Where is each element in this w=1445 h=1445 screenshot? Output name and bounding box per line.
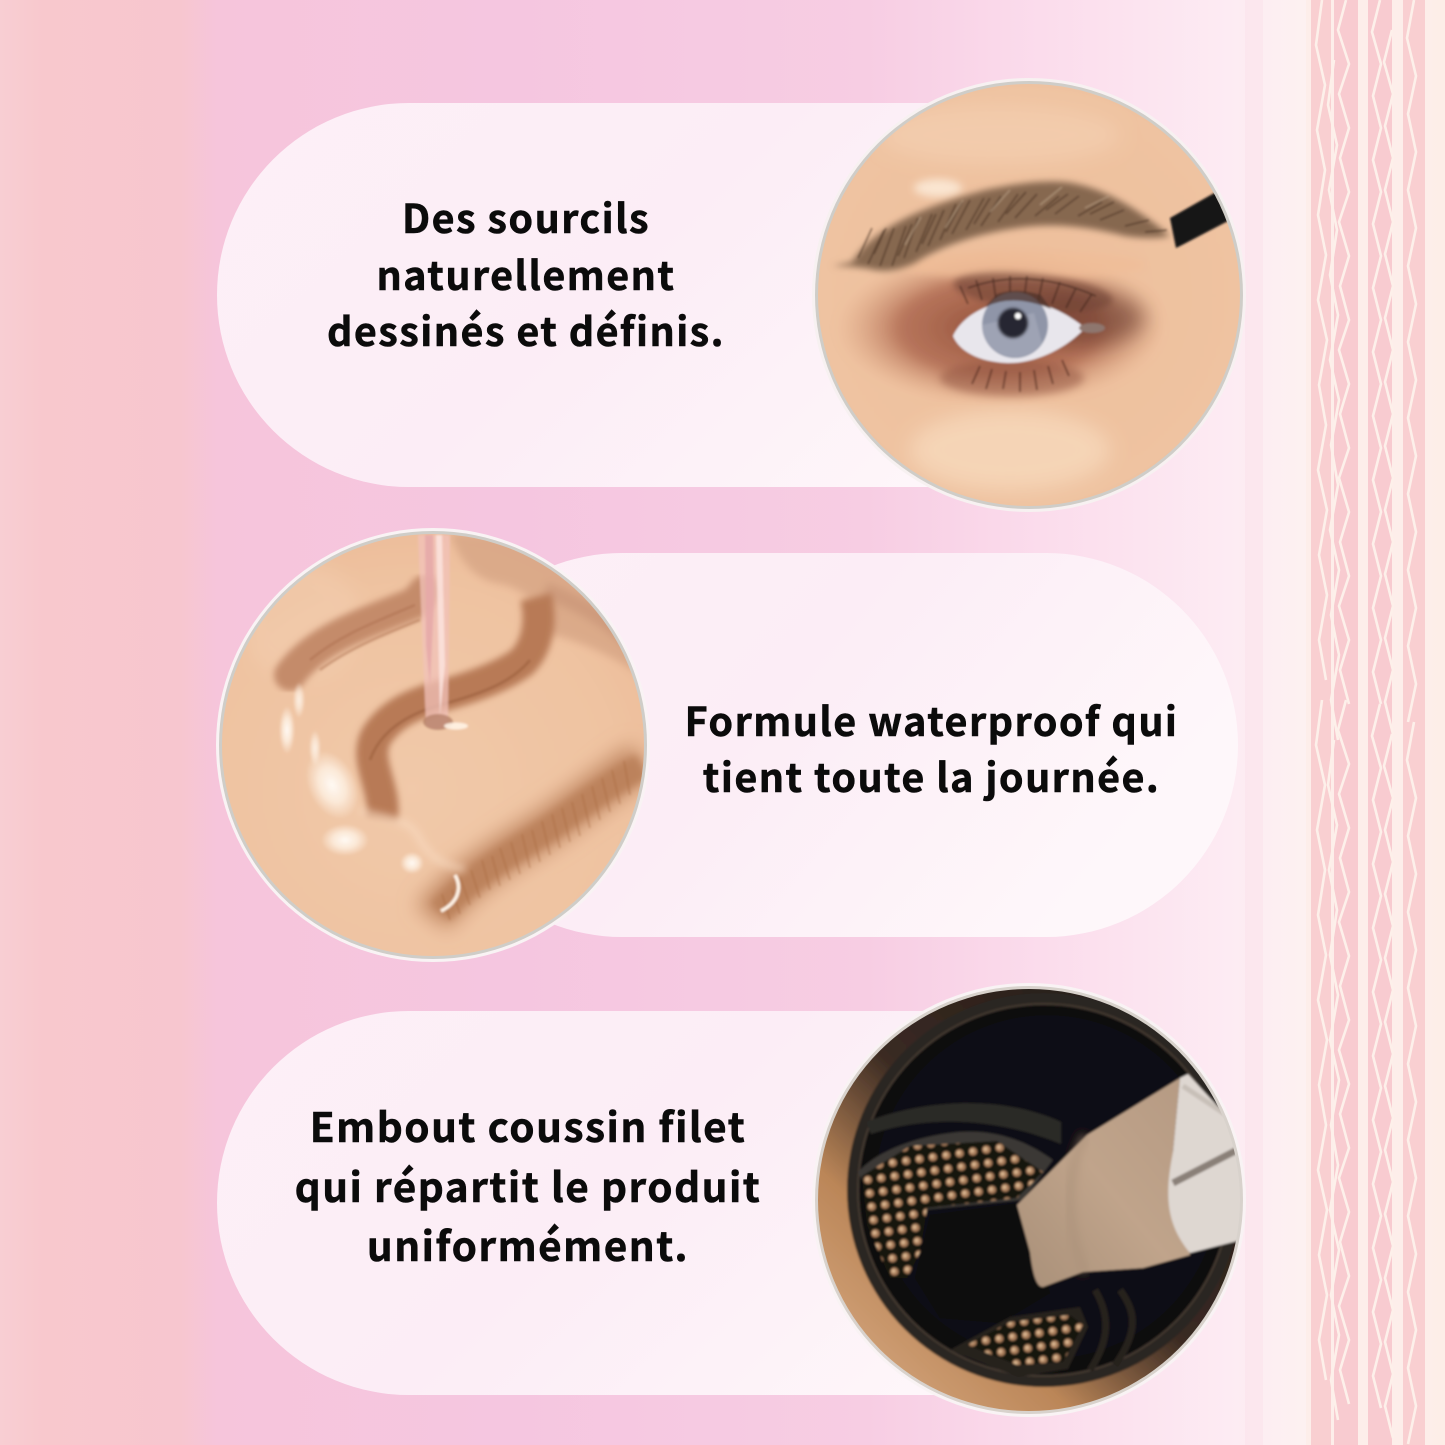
text: mesh cushion: Embout coussin filet [310,1095,746,1154]
water stream [418,535,450,730]
inner rim [847,993,1241,1387]
eyeball [953,300,1085,363]
decorative lace strip [1306,0,1432,1445]
lower brow stroke [432,760,642,918]
text: mesh cushion [295,1095,761,1273]
pill: natural brows [217,103,1217,487]
brush [1170,192,1230,248]
upper lash band [952,268,1114,311]
mesh patches [862,1141,1043,1278]
cushion pad ring [866,1103,1061,1144]
panel: natural brows [217,70,1260,520]
text: natural brows: naturellement [376,245,676,302]
text: natural brows [327,188,725,358]
photo: water on brow swatch [216,528,647,962]
eye socket shadow [850,270,1151,400]
pill: mesh cushion [217,1011,1217,1395]
photo: cushion applicator [800,975,1260,1417]
text: mesh cushion: uniformément. [367,1214,689,1273]
text: waterproof: tient toute la journée. [703,747,1160,804]
applicator tube [1168,1074,1245,1253]
middle brow stroke [372,597,538,818]
glare spots [308,754,356,816]
upper-right shaded fold [452,535,630,669]
upper brow stroke [290,591,425,675]
pill: waterproof [430,553,1238,937]
text: waterproof [685,691,1178,804]
panel: waterproof [205,520,1238,970]
photo: eye and eyebrow [800,70,1260,520]
text: waterproof: Formule waterproof qui [685,691,1178,748]
under-eye shadow and lower lashes [940,360,1084,396]
eyebrow [832,181,1170,271]
text: natural brows: Des sourcils [402,188,650,245]
text: natural brows: dessinés et définis. [327,301,725,358]
panel: mesh cushion [217,975,1260,1417]
text: mesh cushion: qui répartit le produit [295,1155,761,1214]
applicator nozzle [1017,1078,1190,1287]
